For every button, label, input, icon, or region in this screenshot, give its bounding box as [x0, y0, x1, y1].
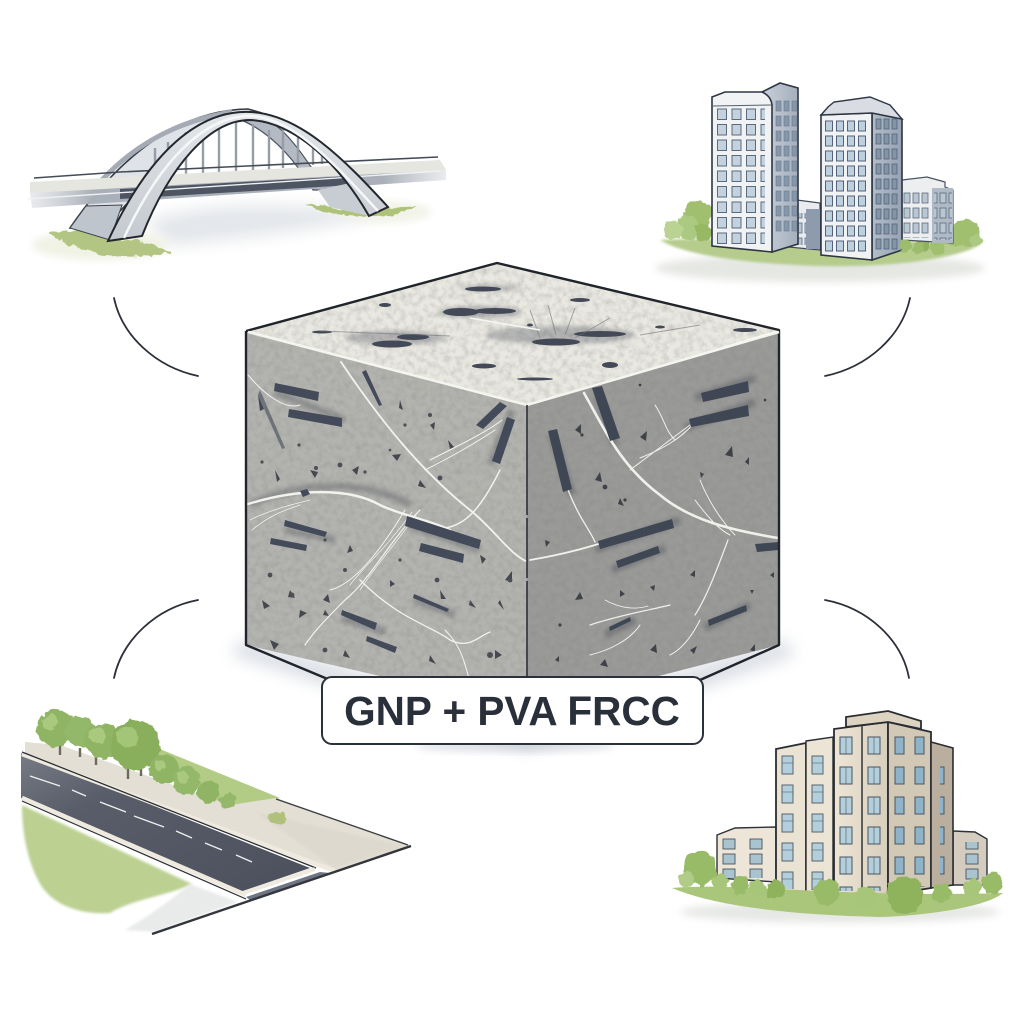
connector arc: bottom left — [114, 600, 198, 678]
left face — [246, 331, 527, 710]
illustration: road pavement corner — [21, 709, 411, 934]
hangers — [155, 118, 322, 177]
concrete cube — [246, 263, 779, 710]
right shrubs — [916, 219, 982, 255]
lawn — [672, 887, 1003, 917]
label: GNP + PVA FRCC: GNP + PVA FRCC — [344, 688, 680, 734]
front edge — [152, 846, 411, 934]
lower gray verge — [125, 884, 238, 932]
right wing — [953, 831, 987, 885]
ground shadow — [655, 254, 985, 282]
flecks — [258, 395, 512, 664]
pits — [558, 384, 766, 627]
right face — [527, 332, 779, 710]
front shrubs — [899, 240, 924, 254]
crossing end strip — [246, 872, 330, 900]
right pier — [318, 183, 388, 216]
ground shadow — [680, 901, 1000, 923]
bars — [548, 381, 779, 631]
fibres — [530, 393, 778, 655]
connector arc: bottom right — [825, 600, 909, 678]
flecks — [545, 424, 774, 667]
asphalt road — [21, 753, 310, 892]
back arch — [70, 109, 262, 231]
tower two side face — [872, 113, 902, 260]
left face markings — [248, 362, 528, 680]
dirt patch — [267, 812, 287, 824]
tower one side face — [762, 83, 798, 252]
upper grass — [150, 745, 280, 810]
pavement — [25, 742, 410, 872]
front vertical edge — [526, 405, 528, 677]
water shadow — [145, 205, 385, 246]
top face bright edges — [248, 332, 779, 405]
back right block — [902, 177, 953, 243]
cube shadow — [232, 640, 795, 750]
lower left grass — [22, 805, 192, 913]
left wing — [717, 827, 776, 882]
bar shadows — [250, 392, 512, 632]
grass patches — [32, 201, 431, 260]
right bay — [888, 722, 931, 895]
bar shadows — [552, 378, 755, 635]
second bay — [806, 737, 833, 893]
illustration: arch bridge — [28, 109, 446, 260]
top face — [246, 263, 779, 405]
tower one front face — [712, 92, 772, 252]
illustration: twin high-rise towers — [655, 83, 985, 282]
front arch — [108, 112, 388, 241]
label: GNP + PVA FRCC — [322, 677, 703, 744]
road markings — [30, 776, 252, 862]
small central block — [787, 200, 820, 250]
deck lower band — [30, 170, 446, 208]
lawn — [660, 239, 984, 266]
deck railing — [34, 157, 438, 178]
tower two front face — [821, 113, 872, 260]
pits — [260, 413, 512, 658]
connector arc: top left — [114, 298, 198, 376]
tower two roof — [821, 97, 902, 119]
label pill shadow — [415, 740, 615, 752]
centre bay — [834, 722, 888, 895]
left shrubs — [664, 201, 713, 241]
top face markings — [312, 285, 757, 380]
shrubs — [678, 851, 1003, 914]
far right bay — [931, 742, 953, 888]
kerbs — [22, 752, 335, 899]
deck surface — [30, 160, 446, 193]
cube outline — [246, 263, 779, 680]
illustration: mid-rise apartment building — [672, 711, 1003, 923]
left bay — [776, 743, 806, 893]
connector arc: top right — [825, 298, 910, 376]
trees — [37, 709, 236, 809]
deck underside — [120, 176, 352, 199]
fibres — [248, 362, 528, 680]
bars — [258, 370, 515, 653]
right face markings — [530, 378, 779, 667]
penthouse — [846, 711, 921, 729]
left pier — [70, 205, 122, 240]
